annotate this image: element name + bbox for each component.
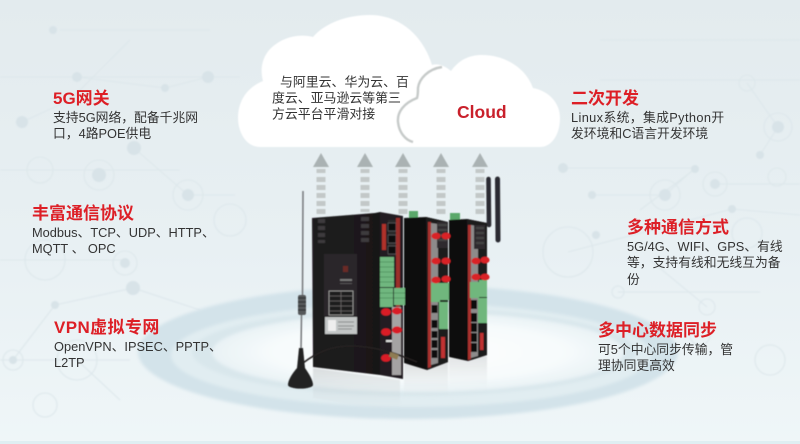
cloud description text: 度云、亚马逊云等第三 [272, 90, 401, 106]
device 1 (front) [312, 212, 405, 379]
text: protocols: Modbus、TCP、UDP、HTTP、 [32, 225, 215, 240]
upward arrows [313, 153, 488, 214]
text: VPN: L2TP [54, 355, 85, 370]
cloud description text: 方云平台平滑对接 [272, 106, 375, 122]
text: multi-center sync: 可5个中心同步传输，管 [598, 342, 733, 357]
heading: VPN: VPN虚拟专网 [54, 318, 160, 337]
text: secondary development: Linux系统，集成Python开 [571, 110, 725, 125]
text: secondary development: 发环境和C语言开发环境 [571, 126, 708, 141]
text: secondary development [571, 110, 725, 141]
text: communication methods [627, 239, 783, 287]
text: protocols: MQTT 、 OPC [32, 241, 116, 256]
magnetic antenna with cable [288, 191, 417, 389]
text: VPN [54, 339, 222, 370]
text: communication methods: 份 [627, 272, 640, 287]
panel: protocols [32, 204, 215, 256]
device 2 (middle) [404, 211, 451, 370]
text: communication methods: 等，支持有线和无线互为备 [627, 255, 781, 270]
text: communication methods: 5G/4G、WIFI、GPS、有线 [627, 239, 783, 254]
heading: protocols: 丰富通信协议 [32, 204, 134, 223]
device reflection [313, 356, 487, 412]
text: VPN: OpenVPN、IPSEC、PPTP、 [54, 339, 222, 354]
text: multi-center sync [598, 342, 733, 373]
water ripple platform [138, 285, 678, 419]
panel: multi-center sync [598, 321, 733, 373]
heading: communication methods: 多种通信方式 [627, 218, 729, 237]
panel: communication methods [627, 218, 783, 287]
cloud description text: 与阿里云、华为云、百 [280, 74, 409, 90]
heading: 5G gateway: 5G网关 [53, 89, 110, 108]
device 3 (rear) [449, 179, 498, 361]
panel: secondary development [571, 89, 725, 141]
panel: 5G gateway [53, 89, 198, 141]
router devices [312, 179, 498, 379]
text: 5G gateway [53, 110, 198, 141]
panel: VPN [54, 318, 222, 370]
text: 5G gateway: 口，4路POE供电 [53, 126, 151, 141]
heading: multi-center sync: 多中心数据同步 [598, 321, 717, 340]
text: 5G gateway: 支持5G网络，配备千兆网 [53, 110, 198, 125]
text: multi-center sync: 理协同更高效 [598, 358, 675, 373]
text: protocols [32, 225, 215, 256]
cloud [238, 15, 560, 147]
heading: secondary development: 二次开发 [571, 89, 639, 108]
cloud label: Cloud [457, 102, 507, 122]
bottom edge line [0, 441, 800, 444]
